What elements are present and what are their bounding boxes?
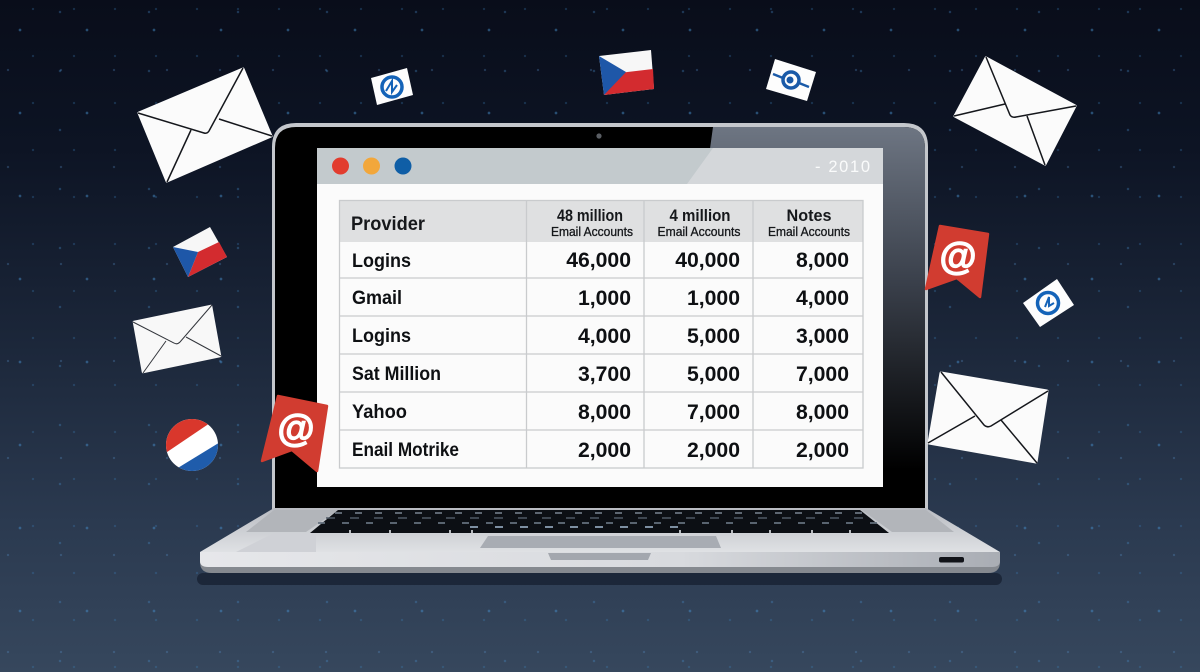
table row: Email Motrike: 2,000 — [796, 439, 849, 462]
icon: red at-sign bookmark left: @ — [277, 408, 315, 450]
table row: Sat Million: 5,000 — [687, 363, 740, 386]
icon: red at-sign bookmark right — [926, 226, 988, 297]
table header: Email Accounts — [551, 225, 633, 239]
icon: Czech flag top — [599, 50, 654, 95]
table row: Email Motrike: 2,000 — [687, 439, 740, 462]
icon: Czech flag left — [173, 227, 227, 277]
app window — [317, 148, 883, 487]
table row: Yahoo: Yahoo — [352, 401, 407, 423]
icon: envelope lower right — [928, 372, 1048, 463]
table row: Logins second — [352, 325, 849, 348]
table row: Logins: 46,000 — [566, 249, 631, 272]
table row: Email Motrike: Enail Motrike — [352, 439, 459, 461]
icon: blue at tag right — [1023, 279, 1074, 327]
icon: red at-sign bookmark left — [262, 396, 327, 471]
icon: envelope left — [133, 305, 221, 373]
laptop — [197, 123, 1002, 585]
table row: Logins — [352, 249, 849, 272]
table row: Sat Million: 7,000 — [796, 363, 849, 386]
table row: Logins second: Logins — [352, 325, 411, 347]
table header: Notes — [786, 207, 832, 225]
table row: Sat Million: Sat Million — [352, 363, 441, 385]
table row: Gmail: 1,000 — [687, 287, 740, 310]
table row: Gmail — [352, 287, 849, 310]
table row: Logins: Logins — [352, 250, 411, 272]
icon: envelope top left — [138, 68, 272, 182]
table row: Logins second: 4,000 — [578, 325, 631, 348]
laptop deck — [200, 508, 1000, 552]
table row: Yahoo: 8,000 — [796, 401, 849, 424]
table row: Email Motrike — [352, 439, 849, 462]
table row: Email Motrike: 2,000 — [578, 439, 631, 462]
table row: Gmail: Gmail — [352, 287, 402, 309]
icon: blue eye tag top — [766, 59, 816, 101]
table row: Gmail: 4,000 — [796, 287, 849, 310]
table row: Gmail: 1,000 — [578, 287, 631, 310]
table row: Logins: 8,000 — [796, 249, 849, 272]
laptop lid — [272, 123, 928, 512]
table header: 48 million — [557, 207, 623, 225]
table header: Provider — [351, 213, 425, 235]
table row: Sat Million — [352, 363, 849, 386]
table header — [339, 200, 863, 242]
window body — [317, 148, 883, 487]
keyboard — [310, 510, 889, 533]
window title bar — [317, 148, 883, 184]
infographic scene — [132, 50, 1076, 585]
table row: Logins second: 5,000 — [687, 325, 740, 348]
table row: Logins second: 3,000 — [796, 325, 849, 348]
table — [339, 200, 863, 468]
table row: Yahoo: 8,000 — [578, 401, 631, 424]
icon: round striped flag — [166, 419, 218, 471]
icon: red at-sign bookmark right: @ — [939, 236, 977, 278]
window title bar: - 2010 — [815, 158, 870, 176]
laptop front edge — [200, 552, 1000, 573]
table row: Yahoo — [352, 401, 849, 424]
table header: Email Accounts — [768, 225, 850, 239]
table header: Email Accounts — [658, 225, 740, 239]
table row: Logins: 40,000 — [675, 249, 740, 272]
icon: envelope top right — [954, 57, 1076, 165]
trackpad — [480, 536, 721, 548]
table header: 4 million — [670, 207, 730, 225]
table row: Sat Million: 3,700 — [578, 363, 631, 386]
laptop base shadow — [197, 573, 1002, 585]
table row: Yahoo: 7,000 — [687, 401, 740, 424]
icon: blue at tag top left — [371, 68, 413, 105]
